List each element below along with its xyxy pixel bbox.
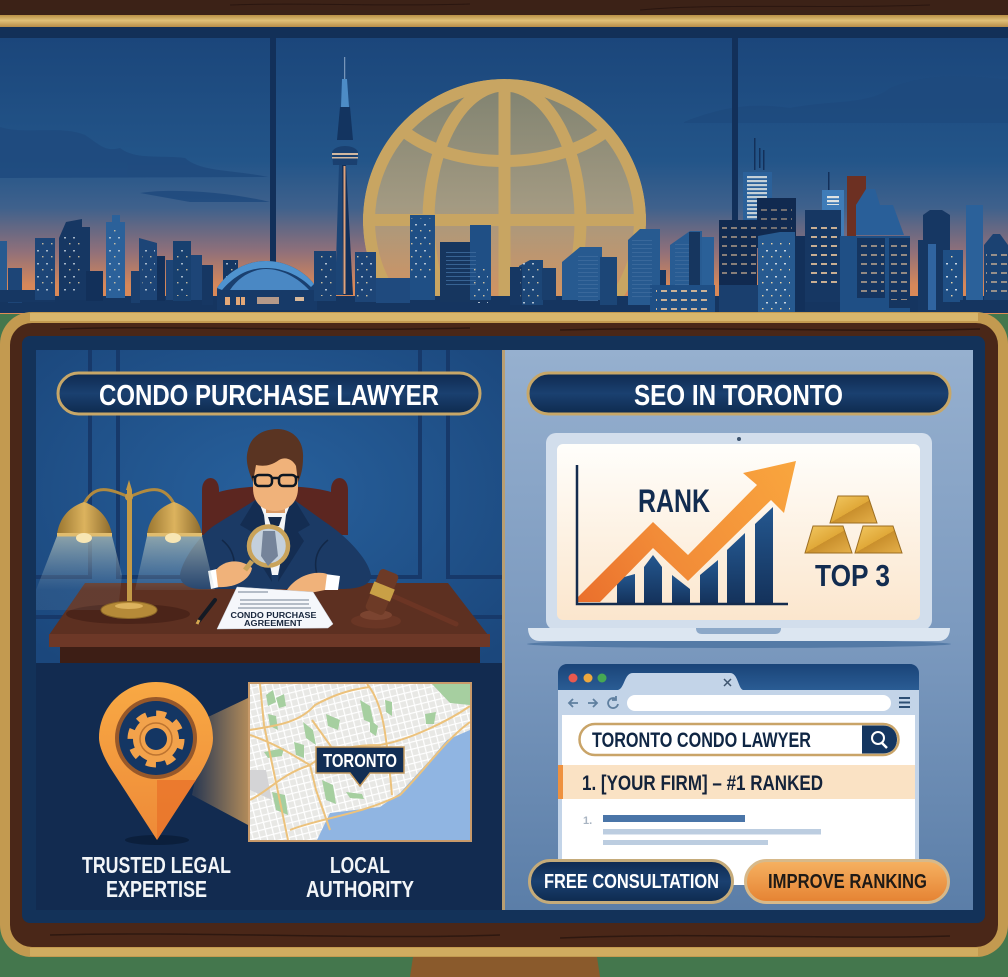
windows left xyxy=(37,226,236,296)
lake xyxy=(317,730,470,840)
top result highlight xyxy=(558,765,915,799)
lower navy area xyxy=(36,663,502,910)
monitor frame with gold trim and wood xyxy=(0,312,1008,957)
chair xyxy=(202,478,348,535)
gold bars xyxy=(805,496,902,553)
panel: right, SEO in Toronto xyxy=(505,350,973,910)
search box: TORONTO CONDO LAWYER xyxy=(592,728,811,752)
monitor stand xyxy=(410,957,600,977)
gavel xyxy=(351,567,456,628)
back row buildings left xyxy=(0,215,238,305)
heading: CONDO PURCHASE LAWYER xyxy=(99,380,439,412)
right hand and cuff xyxy=(287,573,340,594)
suit xyxy=(180,499,371,589)
left hand and cuff xyxy=(208,561,252,589)
hair xyxy=(247,429,303,482)
button: improve ranking xyxy=(746,860,948,902)
panel: left, condo purchase lawyer xyxy=(36,350,502,910)
magnifying glass xyxy=(245,526,288,570)
caption: local authority: AUTHORITY xyxy=(306,876,414,902)
lamp base xyxy=(101,602,157,618)
button: free consultation xyxy=(530,860,732,902)
gear icon xyxy=(131,714,181,764)
window dots xyxy=(568,674,606,682)
face xyxy=(253,452,298,511)
roads xyxy=(250,684,470,840)
trusted legal expertise pin xyxy=(99,682,248,845)
top 3 label: TOP 3 xyxy=(815,558,890,593)
top result highlight: 1. [YOUR FIRM] – #1 RANKED xyxy=(582,771,823,795)
divider between panels xyxy=(502,350,505,910)
laptop with rank chart xyxy=(527,433,951,648)
windows mid xyxy=(318,218,711,311)
caption: trusted legal expertise: EXPERTISE xyxy=(106,876,207,902)
growth arrow xyxy=(577,461,796,602)
fountain pen xyxy=(197,600,215,624)
globe xyxy=(363,79,646,296)
lawyer figure xyxy=(180,429,371,594)
browser window xyxy=(558,664,919,885)
pin shadow xyxy=(125,835,189,845)
glasses xyxy=(252,475,299,486)
wall panels xyxy=(36,350,502,617)
caption: local authority xyxy=(306,852,414,902)
chart axes xyxy=(577,465,788,604)
map label xyxy=(316,747,404,786)
CN Tower xyxy=(332,57,358,295)
caption: local authority: LOCAL xyxy=(330,852,390,878)
caption: trusted legal expertise: TRUSTED LEGAL xyxy=(82,852,231,878)
second result placeholder xyxy=(583,815,821,845)
wall background xyxy=(36,350,502,666)
agreement document: CONDO PURCHASE xyxy=(230,611,317,620)
ground row xyxy=(0,296,1008,313)
desk lamp xyxy=(36,480,215,618)
second result placeholder: 1. xyxy=(583,815,592,827)
clouds xyxy=(0,76,1008,202)
light beam to map xyxy=(192,698,248,825)
nav icons xyxy=(569,696,618,708)
rank label: RANK xyxy=(638,483,710,519)
window mullions xyxy=(270,38,276,263)
mid buildings xyxy=(314,215,715,312)
light cones xyxy=(36,536,122,610)
button: free consultation: FREE CONSULTATION xyxy=(544,870,719,893)
agreement document: AGREEMENT xyxy=(244,619,302,628)
heading: SEO IN TORONTO xyxy=(634,380,843,412)
toronto map xyxy=(248,682,472,842)
sky gradient xyxy=(0,38,1008,314)
dome stadium xyxy=(217,261,317,310)
button: improve ranking: IMPROVE RANKING xyxy=(768,870,927,893)
shades xyxy=(57,502,112,534)
caption: trusted legal expertise xyxy=(82,852,231,902)
heading xyxy=(58,373,480,414)
downtown towers right xyxy=(719,138,1008,312)
neck xyxy=(266,503,285,513)
desk xyxy=(49,583,490,663)
parks xyxy=(264,684,470,815)
chart bars xyxy=(617,507,773,603)
window view: Toronto skyline at dusk xyxy=(0,38,1008,314)
map label: TORONTO xyxy=(323,751,397,771)
heading xyxy=(528,373,950,414)
agreement document xyxy=(217,587,333,629)
